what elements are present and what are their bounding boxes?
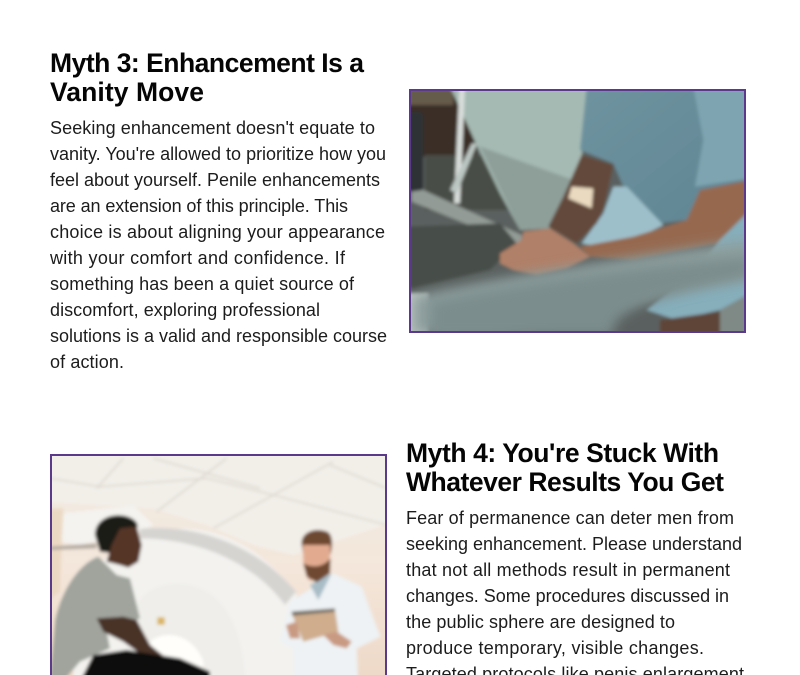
text block: Myth 3 body: something has been a quiet source of — [50, 274, 355, 294]
text block: Myth 4 body: changes. Some procedures discussed in — [406, 586, 729, 606]
text block: Myth 4 body: produce temporary, visible changes. — [406, 638, 704, 658]
image: doctor and patient beside MRI scanner — [47, 452, 390, 675]
text block: Myth 3 body: with your comfort and confidence. If — [49, 248, 346, 268]
text block: Myth 3 body: choice is about aligning your appearance — [50, 222, 385, 242]
text block: Myth 3 body: solutions is a valid and responsible course — [50, 326, 387, 346]
image: patient with IV in hospital bed — [407, 87, 750, 337]
text block: Myth 3 body — [49, 118, 387, 372]
text block: Myth 4 body — [406, 508, 744, 675]
heading: Myth 3: Vanity Move — [50, 77, 204, 107]
text block: Myth 4 body: seeking enhancement. Please understand — [406, 534, 742, 554]
text block: Myth 3 body: of action. — [50, 352, 124, 372]
text block: Myth 3 body: vanity. You're allowed to prioritize how you — [50, 144, 386, 164]
text block: Myth 4 body: Fear of permanence can deter men from — [406, 508, 734, 528]
heading: Myth 4: Myth 4: You're Stuck With — [406, 438, 719, 468]
heading: Myth 3: Myth 3: Enhancement Is a — [50, 48, 364, 78]
text block: Myth 3 body: Seeking enhancement doesn't equate to — [50, 118, 375, 138]
text block: Myth 4 body: the public sphere are designed to — [406, 612, 675, 632]
text block: Myth 4 body: that not all methods result in permanent — [406, 560, 730, 580]
text block: Myth 3 body: are an extension of this principle. This — [50, 196, 348, 216]
heading: Myth 3 — [50, 48, 364, 107]
heading: Myth 4 — [406, 438, 724, 497]
text block: Myth 3 body: discomfort, exploring professional — [50, 300, 320, 320]
heading: Myth 4: Whatever Results You Get — [406, 467, 724, 497]
text block: Myth 3 body: feel about yourself. Penile enhancements — [50, 170, 380, 190]
